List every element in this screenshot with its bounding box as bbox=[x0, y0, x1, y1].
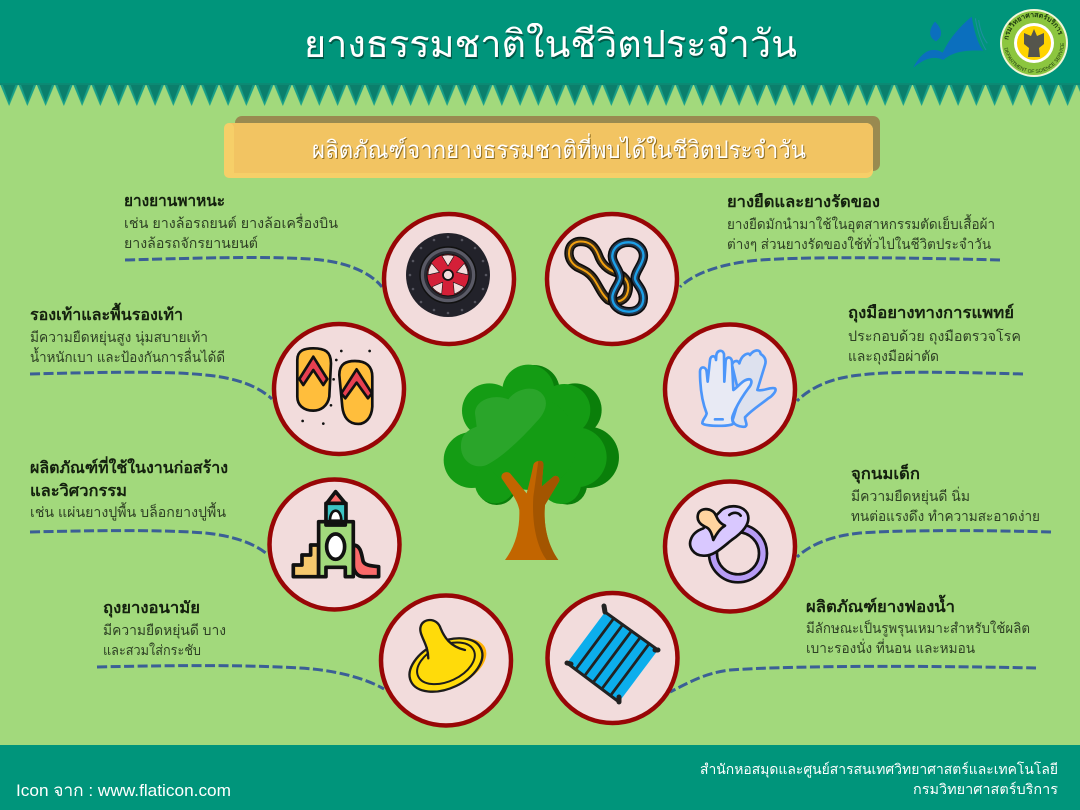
icon: flip-flops bbox=[297, 348, 372, 425]
item circle bbox=[547, 214, 677, 344]
item circle bbox=[384, 214, 514, 344]
description: ทนต่อแรงดึง ทำความสะอาดง่าย bbox=[851, 508, 1040, 524]
footer: organisation: สำนักหอสมุดและศูนย์สารสนเทศวิทยาศาสตร์และเทคโนโลยี bbox=[700, 761, 1058, 778]
description: ต่างๆ ส่วนยางรัดของใช้ทั่วไปในชีวิตประจำวัน bbox=[727, 235, 991, 252]
description: น้ำหนักเบา และป้องกันการลื่นได้ดี bbox=[30, 347, 225, 365]
subtitle banner: ผลิตภัณฑ์จากยางธรรมชาติที่พบได้ในชีวิตประจำวัน bbox=[312, 133, 806, 164]
heading: ยางยืดและยางรัดของ bbox=[727, 193, 880, 211]
icon: tyre bbox=[406, 233, 490, 317]
logo: Department of Science Service seal: กรมวิทยาศาสตร์บริการ bbox=[1004, 12, 1062, 40]
description bbox=[124, 214, 338, 251]
footer: icon credit: Icon จาก : www.flaticon.com bbox=[16, 781, 231, 800]
footer: organisation bbox=[700, 761, 1058, 797]
subtitle banner bbox=[224, 116, 880, 178]
description: มีลักษณะเป็นรูพรุนเหมาะสำหรับใช้ผลิต bbox=[806, 619, 1030, 637]
description bbox=[30, 329, 225, 365]
description bbox=[103, 622, 226, 658]
description bbox=[727, 214, 995, 252]
heading bbox=[30, 456, 228, 500]
description: และสวมใส่กระชับ bbox=[103, 642, 201, 658]
logo: open book bbox=[913, 17, 987, 68]
icon: foam mattress bbox=[567, 606, 658, 702]
description bbox=[848, 328, 1021, 365]
description: เช่น ยางล้อรถยนต์ ยางล้อเครื่องบิน bbox=[124, 214, 338, 231]
panel: foam rubber products bbox=[548, 593, 1030, 723]
panel: baby pacifier bbox=[665, 462, 1040, 612]
heading: รองเท้าและพื้นรองเท้า bbox=[30, 302, 183, 324]
item circle bbox=[274, 324, 404, 454]
description: มีความยืดหยุ่นดี นิ่ม bbox=[851, 487, 970, 505]
title: ยางธรรมชาติในชีวิตประจำวัน bbox=[304, 23, 797, 66]
heading: และวิศวกรรม bbox=[30, 482, 127, 500]
description bbox=[806, 619, 1030, 656]
description: เบาะรองนั่ง ที่นอน และหมอน bbox=[806, 639, 975, 656]
heading: ถุงมือยางทางการแพทย์ bbox=[848, 303, 1014, 323]
icon: playground bbox=[293, 492, 379, 577]
connector lines bbox=[30, 257, 1051, 692]
description bbox=[851, 487, 1040, 524]
footer: organisation: กรมวิทยาศาสตร์บริการ bbox=[913, 781, 1058, 797]
panel: elastic and rubber bands bbox=[547, 193, 995, 344]
description: และถุงมือผ่าตัด bbox=[848, 348, 939, 365]
tree illustration bbox=[444, 365, 619, 560]
item circle bbox=[665, 324, 795, 454]
description: ยางยืดมักนำมาใช้ในอุตสาหกรรมตัดเย็บเสื้อผ้า bbox=[727, 214, 995, 233]
item circle bbox=[270, 480, 400, 610]
heading: ผลิตภัณฑ์ที่ใช้ในงานก่อสร้าง bbox=[30, 456, 228, 477]
icon: gloves bbox=[700, 350, 776, 427]
item circle bbox=[665, 482, 795, 612]
header band bbox=[0, 0, 1080, 106]
description: ประกอบด้วย ถุงมือตรวจโรค bbox=[848, 328, 1021, 345]
logo: Department of Science Service seal bbox=[1000, 9, 1068, 77]
footer band bbox=[0, 745, 1080, 810]
panel: construction and engineering bbox=[30, 456, 400, 610]
item circle bbox=[381, 596, 511, 726]
panel: condoms bbox=[103, 596, 511, 726]
panel: vehicle tyres bbox=[124, 193, 514, 344]
logo: Department of Science Service seal: DEPARTMENT OF SCIENCE SERVICE bbox=[1004, 43, 1064, 73]
icon: condom bbox=[401, 620, 495, 703]
heading: ยางยานพาหนะ bbox=[124, 193, 225, 210]
panel: footwear bbox=[30, 302, 404, 454]
item circle bbox=[548, 593, 678, 723]
description: มีความยืดหยุ่นสูง นุ่มสบายเท้า bbox=[30, 329, 208, 346]
heading: ถุงยางอนามัย bbox=[103, 599, 200, 618]
description: เช่น แผ่นยางปูพื้น บล็อกยางปูพื้น bbox=[30, 502, 226, 521]
icon: pacifier bbox=[690, 506, 767, 582]
icon: rubber bands bbox=[569, 241, 643, 312]
heading: ผลิตภัณฑ์ยางฟองน้ำ bbox=[806, 594, 955, 616]
description: ยางล้อรถจักรยานยนต์ bbox=[124, 235, 258, 251]
heading: จุกนมเด็ก bbox=[851, 462, 920, 484]
description: มีความยืดหยุ่นดี บาง bbox=[103, 622, 226, 639]
panel: medical gloves bbox=[665, 303, 1021, 454]
